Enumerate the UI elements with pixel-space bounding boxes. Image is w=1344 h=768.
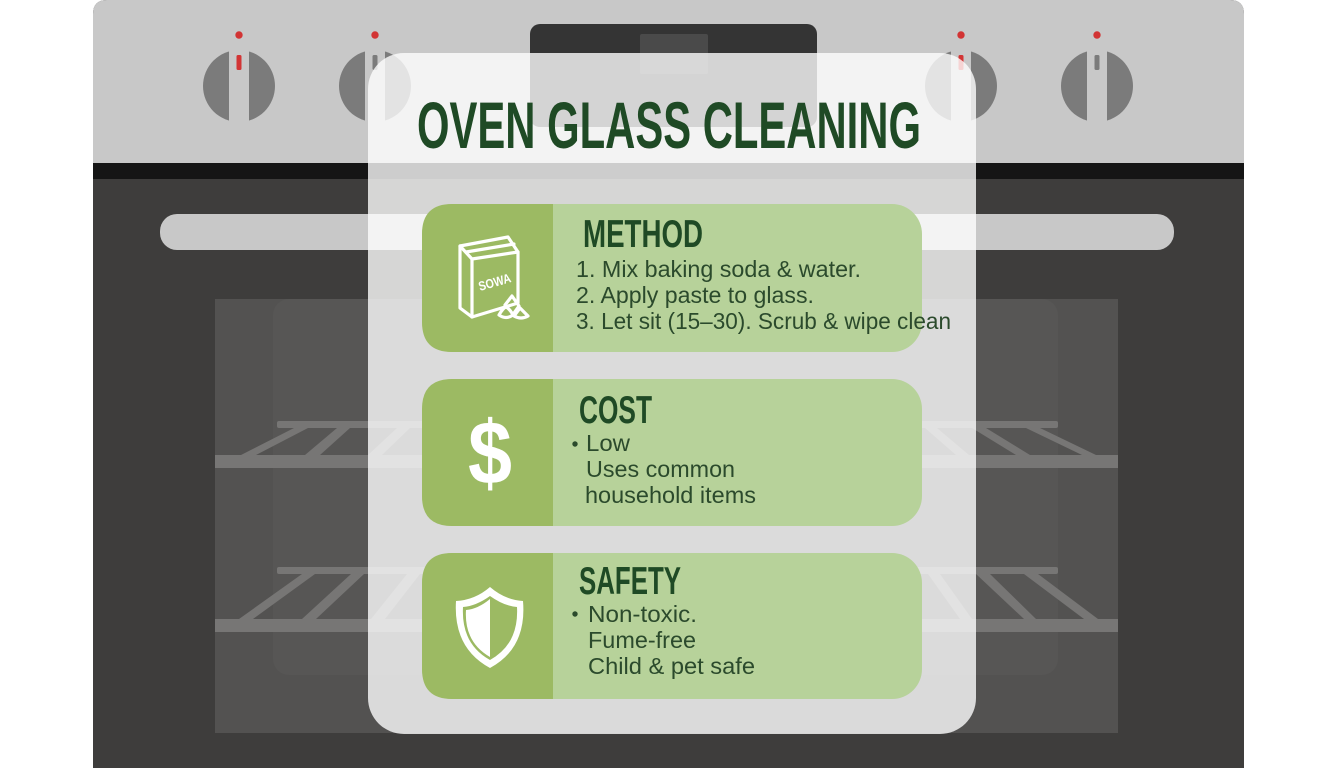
card: cost	[422, 379, 922, 526]
heading: safety: SAFETY	[579, 560, 681, 603]
title: OVEN GLASS CLEANING	[417, 88, 921, 162]
oven rack: upper	[215, 421, 1118, 468]
icon: dollar sign: $	[468, 404, 512, 504]
safety details: Child & pet safe	[588, 653, 755, 679]
icon: shield	[456, 587, 523, 668]
cost details: household items	[585, 482, 756, 508]
method steps: 3. Let sit (15–30). Scrub & wipe clean	[576, 308, 951, 334]
icon: baking soda box	[460, 237, 528, 318]
oven handle	[160, 214, 1174, 250]
safety details	[572, 601, 755, 679]
card: method	[422, 204, 951, 352]
knob 1	[203, 31, 275, 124]
method steps	[576, 256, 951, 334]
icon: baking soda box: SOWA	[477, 270, 513, 294]
knob 3	[925, 31, 997, 124]
knob 2	[339, 31, 411, 124]
method steps: 1. Mix baking soda & water.	[576, 256, 861, 282]
safety details: Non-toxic.	[588, 601, 697, 627]
glass panel	[368, 53, 976, 734]
card: safety	[422, 553, 922, 699]
cost details: Uses common	[586, 456, 735, 482]
oven rack: lower	[215, 567, 1118, 632]
cost details: Low	[586, 430, 630, 456]
oven window	[215, 299, 1118, 733]
heading: cost: COST	[579, 389, 652, 432]
heading: method: METHOD	[583, 213, 703, 256]
oven display	[530, 24, 817, 127]
knob 4	[1061, 31, 1133, 124]
cost details	[572, 430, 756, 508]
safety details: Fume-free	[588, 627, 696, 653]
method steps: 2. Apply paste to glass.	[576, 282, 814, 308]
